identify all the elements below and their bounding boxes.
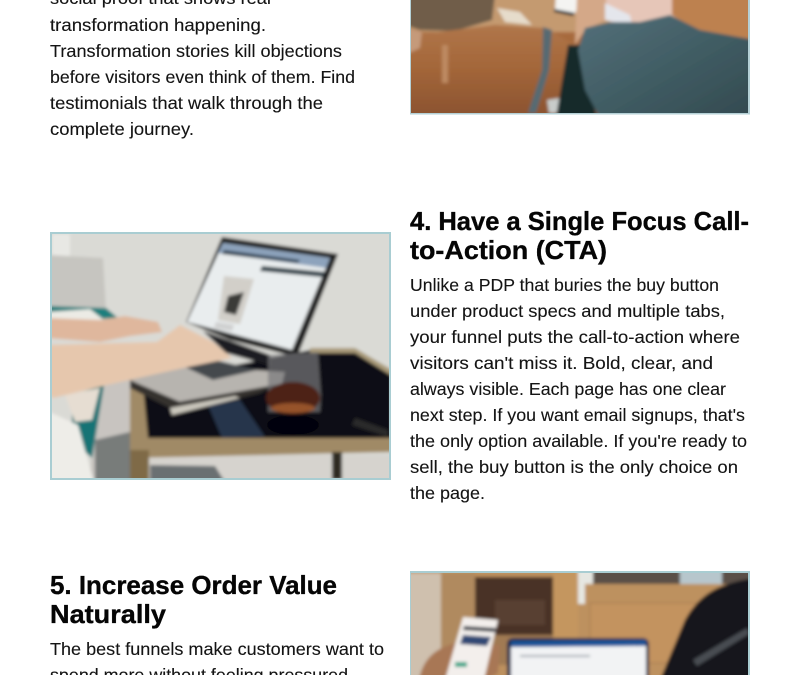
text block: section 4 body: the only option available. If you're ready to bbox=[410, 431, 747, 451]
image: people with phone bbox=[405, 0, 755, 120]
text block: section 3 body: before visitors even think of them. Find bbox=[50, 67, 355, 87]
heading: section 4 bbox=[410, 206, 749, 265]
hands bbox=[48, 316, 162, 342]
glass bbox=[268, 352, 321, 412]
text block: section 3 body: testimonials that walk through the bbox=[50, 93, 323, 113]
heading: section 5: 5. Increase Order Value bbox=[50, 570, 337, 600]
text block: section 4 body bbox=[410, 275, 747, 503]
image: phone and laptop bbox=[405, 570, 755, 675]
heading: section 5: Naturally bbox=[50, 599, 167, 629]
heading: section 5 bbox=[50, 570, 337, 629]
text block: section 5 body: The best funnels make customers want to bbox=[50, 639, 384, 659]
text block: section 5 body bbox=[50, 639, 384, 675]
heading: section 4: to-Action (CTA) bbox=[410, 235, 607, 265]
text block: section 3 body: transformation happening. bbox=[50, 15, 266, 35]
text block: section 4 body: Unlike a PDP that buries the buy button bbox=[410, 275, 719, 295]
text block: section 4 body: the page. bbox=[410, 483, 485, 503]
heading: section 4: 4. Have a Single Focus Call- bbox=[410, 206, 749, 236]
text block: section 4 body: next step. If you want email signups, that's bbox=[410, 405, 745, 425]
laptop bbox=[186, 237, 338, 357]
image: laptop on table bbox=[45, 228, 395, 484]
text block: section 4 body: always visible. Each page has one clear bbox=[410, 379, 726, 399]
rug bbox=[90, 380, 132, 478]
text block: section 4 body: sell, the buy button is the only choice on bbox=[410, 457, 738, 477]
table bbox=[135, 350, 392, 442]
text block: section 3 body: Transformation stories kill objections bbox=[50, 41, 342, 61]
text block: section 3 body: complete journey. bbox=[50, 119, 194, 139]
text block: section 4 body: visitors can't miss it. Bold, clear, and bbox=[410, 353, 713, 373]
text block: section 4 body: under product specs and multiple tabs, bbox=[410, 301, 725, 321]
text block: section 4 body: your funnel puts the call-to-action where bbox=[410, 327, 740, 347]
text block: section 3 body bbox=[50, 0, 355, 139]
